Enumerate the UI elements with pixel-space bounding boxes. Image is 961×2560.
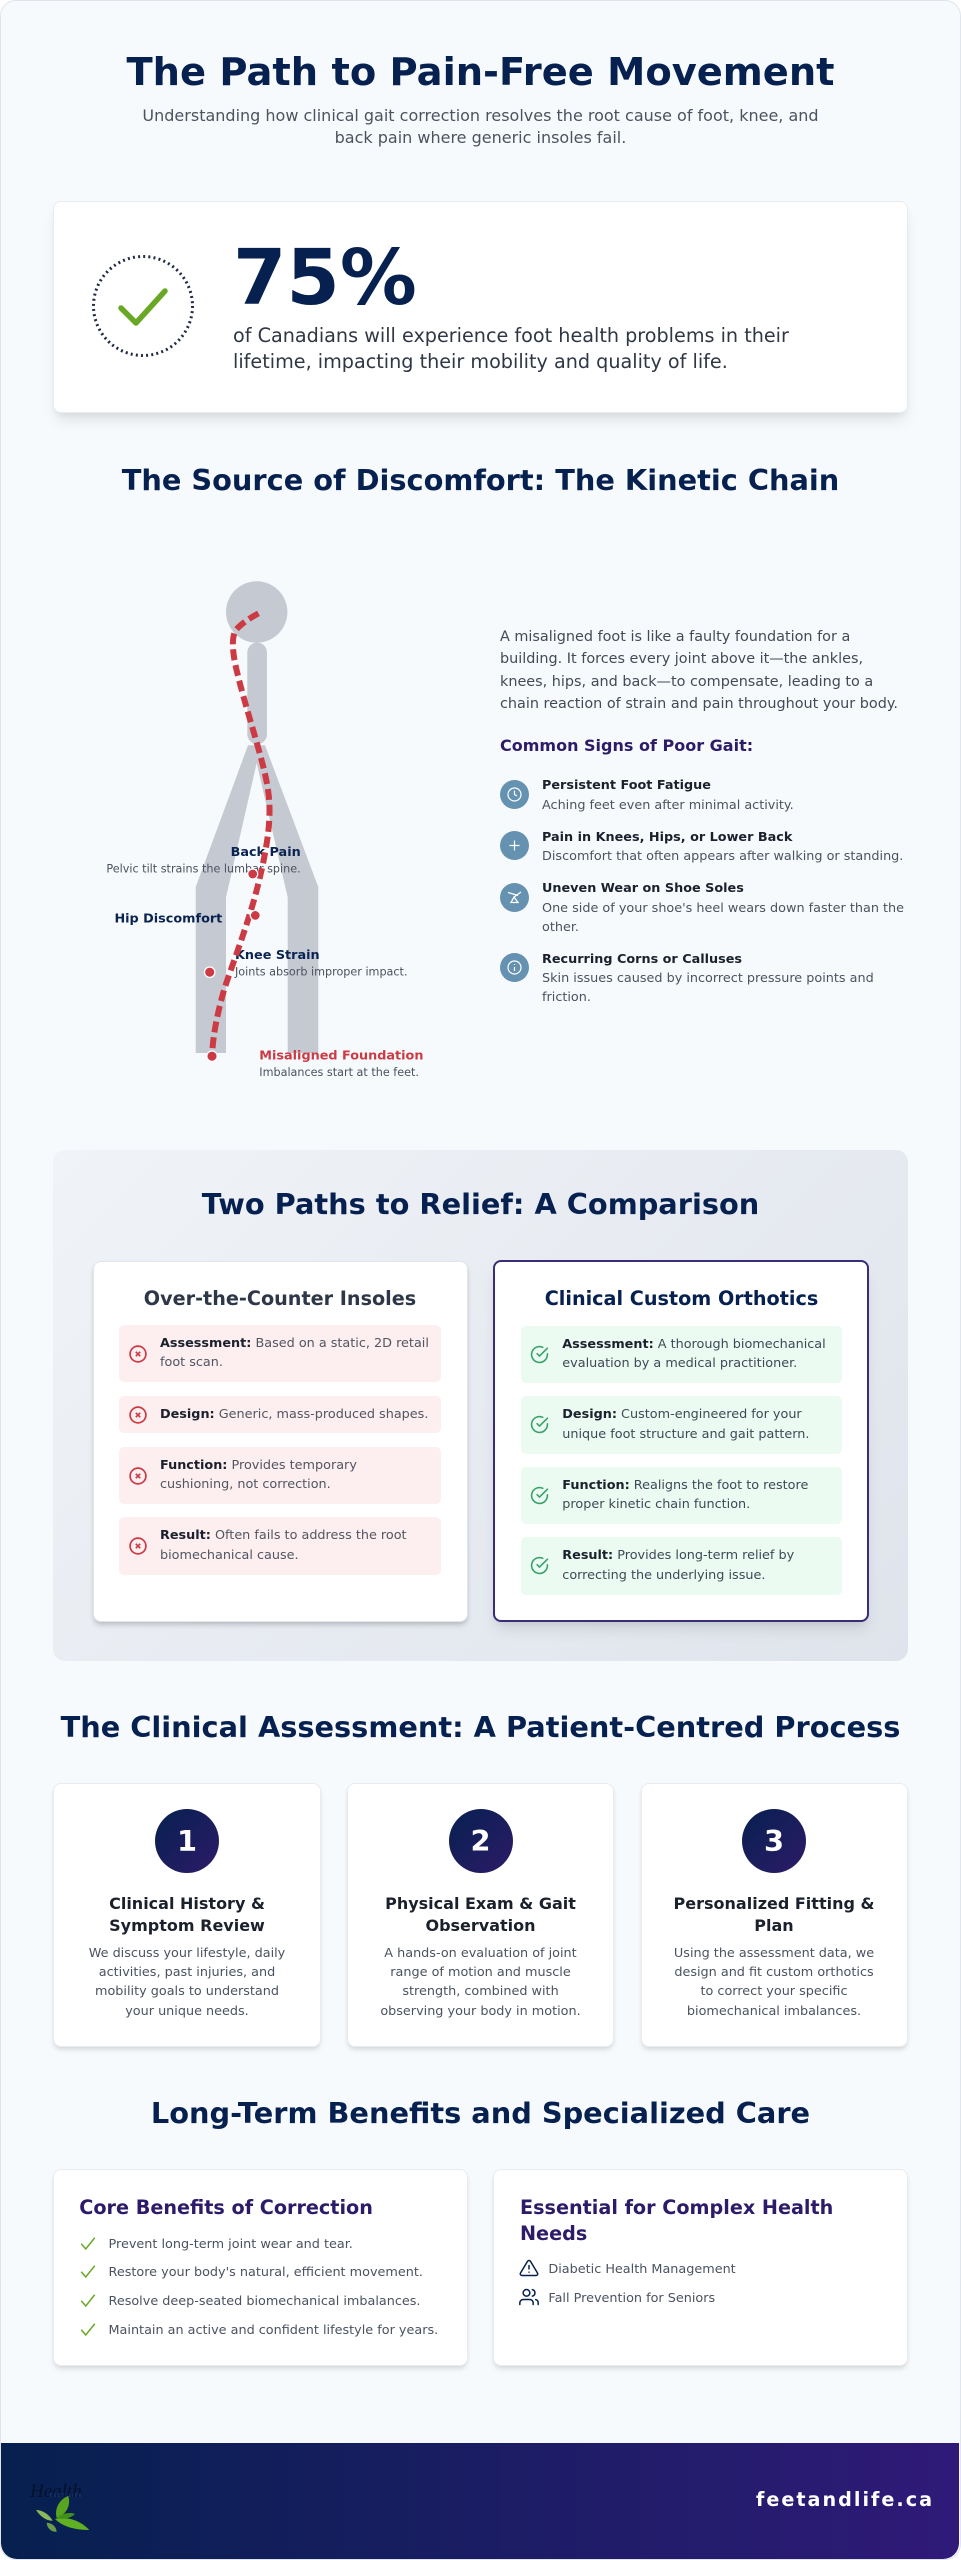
sign: joint pain description: Discomfort that often appears after walking or standing. (542, 849, 903, 864)
sign: uneven wear description: other. (542, 920, 579, 935)
step 3 number: 3 (764, 1824, 784, 1858)
sign: corns title: Recurring Corns or Calluses (542, 952, 742, 966)
row: orthotics result: correcting the underlying issue. (562, 1568, 765, 1582)
step 2 number: 2 (470, 1824, 491, 1858)
sign: corns description: friction. (542, 990, 591, 1005)
row: orthotics function: proper kinetic chain function. (562, 1497, 750, 1512)
step 1 number (155, 1809, 219, 1873)
sign: uneven wear description: One side of your shoe's heel wears down faster than the (542, 900, 904, 916)
heading: complex health needs: Essential for Complex Health (520, 2196, 833, 2219)
misalignment dashed path (212, 613, 270, 1056)
icon: users (519, 2288, 539, 2306)
subtitle: Understanding how clinical gait correction resolves the root cause of foot, knee, and (142, 106, 819, 125)
step 1 description (89, 1946, 285, 2019)
card: step 2 (347, 1783, 614, 2047)
card: step 3 (640, 1783, 908, 2047)
step 2 description (380, 1946, 581, 2019)
big number 75%: 75% (233, 234, 417, 323)
heading: long-term benefits: Long-Term Benefits and Specialized Care (151, 2096, 810, 2130)
step 2 description: range of motion and muscle (390, 1965, 571, 1980)
step 3 description: design and fit custom orthotics (674, 1965, 874, 1980)
text: diabetic: Diabetic Health Management (548, 2262, 736, 2276)
icon: info (500, 953, 529, 982)
labels under the path: Knee Strain (235, 948, 320, 963)
heading: orthotics: Clinical Custom Orthotics (545, 1287, 818, 1310)
statistic description (233, 324, 789, 373)
heading: core benefits: Core Benefits of Correction (79, 2196, 373, 2219)
icon: clock (500, 780, 529, 809)
row: orthotics function: Function: Realigns the foot to restore (562, 1478, 808, 1493)
step 3 description: Using the assessment data, we (674, 1946, 874, 1961)
heading: clinical assessment: The Clinical Assessment: A Patient-Centred Process (61, 1710, 900, 1744)
step 1 description: mobility goals to understand (95, 1984, 279, 1999)
heading: complex health needs (520, 2196, 833, 2245)
row: insoles design (119, 1396, 441, 1433)
labels under the path: Hip Discomfort (114, 912, 222, 927)
step 2 title (385, 1894, 576, 1935)
card: core benefits (53, 2169, 468, 2366)
row: orthotics assessment (521, 1326, 842, 1383)
pain points (204, 869, 260, 1061)
row: insoles result: Result: Often fails to address the root (160, 1528, 407, 1543)
row: orthotics assessment: Assessment: A thorough biomechanical (562, 1337, 826, 1352)
benefit 4 (80, 2323, 438, 2338)
sign: uneven wear description (542, 900, 904, 935)
text: kinetic chain explanation: A misaligned foot is like a faulty foundation for a (500, 629, 850, 645)
sign: foot fatigue description: Aching feet even after minimal activity. (542, 798, 794, 813)
benefit list (80, 2236, 438, 2338)
sign: uneven wear title: Uneven Wear on Shoe Soles (542, 881, 744, 896)
statistic description: lifetime, impacting their mobility and quality of life. (233, 350, 728, 373)
step 1 title: Symptom Review (109, 1916, 265, 1935)
panel: 75% statistic (53, 201, 908, 413)
labels under the path: Back Pain (231, 845, 301, 860)
subtitle: back pain where generic insoles fail. (335, 128, 626, 147)
icon: dotted circle check (92, 255, 194, 357)
body silhouette (196, 581, 318, 1053)
logo: Health (29, 2481, 82, 2502)
row: orthotics design: Design: Custom-engineered for your (562, 1407, 802, 1422)
subtitle (142, 106, 819, 147)
step 1 number: 1 (177, 1824, 197, 1858)
step 1 title: Clinical History & (109, 1894, 265, 1913)
row: insoles assessment (119, 1325, 441, 1382)
step 3 number (742, 1809, 806, 1873)
icon: warning triangle (520, 2260, 538, 2276)
labels under the path: Pelvic tilt strains the lumbar spine. (106, 862, 301, 876)
row: orthotics assessment: evaluation by a medical practitioner. (562, 1356, 797, 1371)
labels under the path: Joints absorb improper impact. (234, 966, 408, 978)
step 2 number (448, 1809, 512, 1873)
step 1 description: We discuss your lifestyle, daily (89, 1946, 285, 1961)
row: insoles function: cushioning, not correction. (160, 1477, 331, 1492)
heading: common signs: Common Signs of Poor Gait: (500, 736, 753, 755)
step 3 title: Personalized Fitting & (674, 1894, 874, 1913)
text: kinetic chain explanation: chain reaction of strain and pain throughout your body. (500, 696, 898, 712)
logo: FEET LIFE (50, 2493, 83, 2498)
step 2 description: observing your body in motion. (380, 2004, 581, 2019)
footer website: feetandlife.ca (756, 2488, 934, 2511)
benefit list: Prevent long-term joint wear and tear. (108, 2236, 353, 2252)
step 3 description: biomechanical imbalances. (687, 2004, 861, 2019)
heading: insoles: Over-the-Counter Insoles (144, 1287, 416, 1310)
chart: kinetic chain body figure (106, 581, 423, 1079)
card: clinical custom orthotics (493, 1260, 869, 1622)
sign: joint pain title: Pain in Knees, Hips, or Lower Back (542, 830, 792, 844)
step 1 description: activities, past injuries, and (99, 1965, 275, 1980)
row: orthotics result: Result: Provides long-term relief by (562, 1548, 794, 1563)
row: insoles result: biomechanical cause. (160, 1548, 299, 1562)
row: orthotics result (521, 1537, 842, 1595)
text: fall prevention: Fall Prevention for Seniors (548, 2290, 715, 2306)
row: orthotics design (521, 1396, 842, 1454)
sign: foot fatigue title: Persistent Foot Fatigue (542, 778, 711, 793)
step 1 title (109, 1894, 265, 1935)
step 3 title: Plan (754, 1916, 794, 1935)
text: kinetic chain explanation (500, 629, 898, 712)
row: insoles function (119, 1447, 441, 1504)
title: The Path to Pain-Free Movement (126, 50, 834, 94)
benefit 1 (80, 2236, 353, 2252)
row: orthotics design: unique foot structure and gait pattern. (562, 1426, 809, 1442)
icon: worn sole (500, 883, 529, 912)
card: complex health needs (493, 2169, 908, 2366)
step 3 description (674, 1946, 874, 2019)
step 3 title (674, 1894, 874, 1935)
sign: corns description (542, 971, 874, 1005)
step 2 title: Observation (425, 1916, 536, 1935)
card: over-the-counter insoles (93, 1260, 468, 1622)
text: kinetic chain explanation: knees, hips, and back—to compensate, leading to a (500, 674, 873, 690)
benefit 3 (80, 2294, 420, 2309)
row: insoles result (119, 1517, 441, 1575)
step 1 description: your unique needs. (125, 2004, 249, 2019)
benefit 2 (80, 2265, 423, 2280)
step 3 description: to correct your specific (700, 1984, 847, 1999)
benefit list: Restore your body's natural, efficient movement. (108, 2265, 423, 2280)
panel: comparison (53, 1150, 908, 1661)
footer (1, 2443, 959, 2558)
labels under the path (106, 845, 423, 1079)
row: insoles assessment: Assessment: Based on a static, 2D retail (160, 1336, 429, 1351)
logo (29, 2481, 90, 2532)
sign: corns description: Skin issues caused by incorrect pressure points and (542, 971, 874, 986)
card: step 1 (53, 1783, 320, 2047)
step 2 title: Physical Exam & Gait (385, 1894, 576, 1913)
row: insoles assessment: foot scan. (160, 1355, 223, 1370)
text: kinetic chain explanation: building. It forces every joint above it—the ankles, (500, 651, 863, 667)
row: insoles design: Design: Generic, mass-produced shapes. (160, 1407, 428, 1422)
heading: complex health needs: Needs (520, 2222, 587, 2245)
labels under the path: Misaligned Foundation (259, 1048, 423, 1063)
labels under the path: Imbalances start at the feet. (259, 1066, 419, 1079)
row: insoles function: Function: Provides temporary (160, 1458, 357, 1473)
heading: kinetic chain: The Source of Discomfort: The Kinetic Chain (122, 462, 839, 496)
row: orthotics function (521, 1467, 842, 1524)
step 2 description: strength, combined with (402, 1984, 559, 1999)
icon: plus (500, 831, 529, 860)
heading: comparison: Two Paths to Relief: A Comparison (202, 1187, 759, 1221)
step 2 description: A hands-on evaluation of joint (384, 1946, 577, 1961)
benefit list: Maintain an active and confident lifestyle for years. (108, 2323, 438, 2338)
statistic description: of Canadians will experience foot health problems in their (233, 324, 789, 347)
benefit list: Resolve deep-seated biomechanical imbalances. (108, 2294, 420, 2309)
